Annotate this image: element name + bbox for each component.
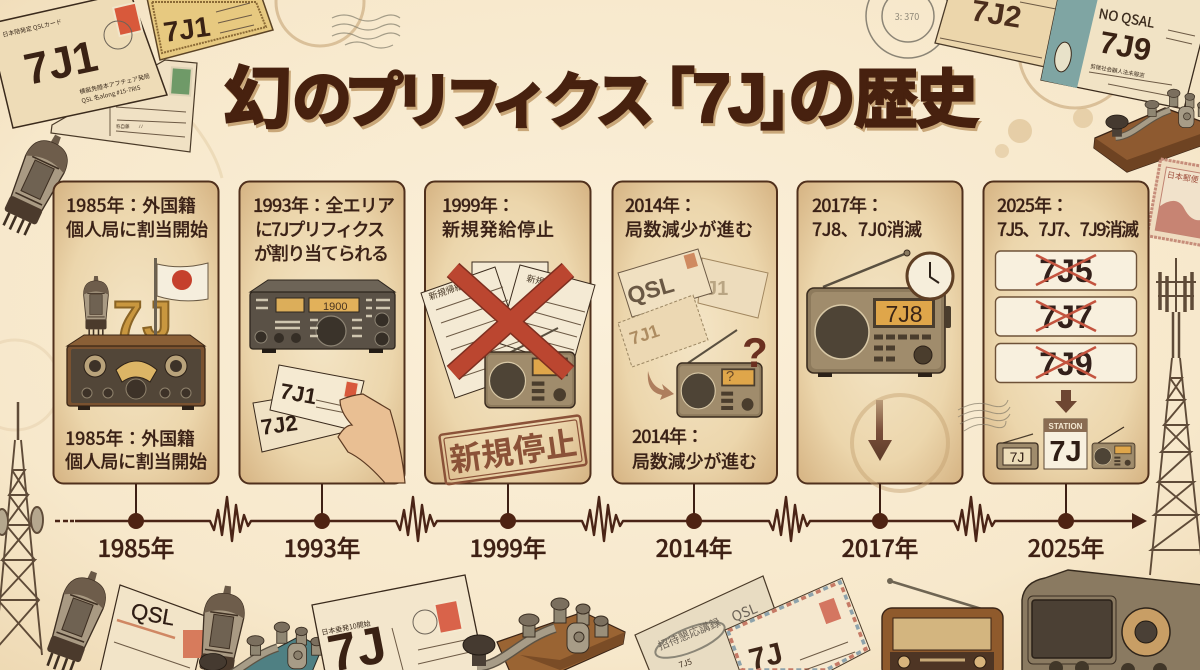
panel: 1993: に7Jプリフィクス [255,216,385,242]
timeline [55,484,1147,564]
panel: 1985: 個人局に割当開始 [66,216,208,242]
panel: 2014 [612,182,777,484]
heading: 1999: 1999年： [442,192,515,218]
panel: 1999 [421,182,595,484]
title: ィ [490,53,550,140]
year labels: 1993年 [284,529,360,564]
postmark top right [866,0,950,58]
faded QSL cards: 7J1 [627,320,662,349]
title: J [728,59,767,137]
QSL cards in hand: 7J2 [259,410,299,440]
icon: radio with question [677,329,768,417]
QSL cards in hand: 7J1 [278,378,319,409]
QSL card: large 7J1: 横艇免陸本アフチェア発局 [78,71,151,96]
year labels: 1985年 [98,529,174,564]
radio tower right [1150,258,1200,575]
heading: 2014: 2014年： [625,192,697,218]
panel: 1999: 新規発給停止 [442,216,554,242]
postage stamp right: 日本郵便 [1166,169,1200,186]
struck 7J7 [996,297,1136,336]
year labels: 2025年 [1028,529,1104,564]
panel: 1993: が割り当てられる [254,240,389,266]
coffee ring [852,395,948,491]
year labels [98,529,1104,564]
icon: transceiver [250,280,395,353]
coffee stains [0,0,1131,430]
faded QSL cards [618,249,768,367]
arrow: timeline head [1132,513,1147,529]
station card [1044,419,1087,469]
panel: 1985: 個人局に割当開始 [65,448,207,474]
arrow: curved [648,371,674,400]
postage stamp right [1147,159,1200,246]
QSL card 7J5 [635,576,775,670]
title: 7 [692,59,731,137]
QSL card: yellow 7J1 [147,0,273,60]
stamp: 新規停止: 新規停止 [446,418,580,482]
QSL card: large 7J1: 日本陪発定 QSLカード [1,17,63,39]
panel: 1993 [240,182,405,484]
papers [421,262,595,398]
icon: mini radio 7J [997,434,1038,469]
title: 幻 [224,43,292,142]
faded QSL cards: QSL [624,271,677,309]
postmark top right: 3: 370 [895,10,919,23]
year labels: 2014年 [656,529,732,564]
QSL card: large 7J1: 7J1 [20,32,102,95]
panel: 1985 [54,182,218,484]
icon: 7J gold letters: 7J [113,291,172,350]
panel: 2025 [984,182,1148,484]
title: 歴 [854,49,918,141]
title: フ [445,57,502,139]
white postcard [51,60,197,152]
arrow: down [1055,390,1077,413]
struck 7J9: 7J9 [1039,346,1093,382]
title: ク [543,53,603,140]
panel: 2014: 局数減少が進む [625,216,753,242]
title: 史 [915,49,979,141]
title: 「 [635,49,695,136]
heading: 1993: 1993年：全エリア [253,192,395,218]
QSL card: large 7J1 [0,0,167,128]
postal wave lines top [332,15,400,48]
title: 」 [760,55,820,142]
title: の [292,51,352,138]
icon: radio with question: ? [742,329,768,376]
timeline nodes [128,513,1074,529]
title: プ [344,53,404,140]
QSL card 7J: 日本垂発10開始 [321,619,371,638]
caption: 2014: 2014年： [632,423,704,449]
icon: mini radio 7J: 7J [1010,449,1024,465]
faded QSL cards: J1 [706,278,728,300]
arrow: down [868,400,892,461]
QSL cards in hand [253,365,405,483]
panel: 2014: 局数減少が進む [632,448,757,474]
icon: Japanese flag [154,258,208,336]
vacuum tube bottom left [38,565,114,670]
QSL card: NO QSAL 7J9: 7J9 [1097,24,1154,68]
QSL card bottom [100,585,208,670]
QSL card 7J5: 招待懇応講録 [656,614,723,654]
struck 7J5: 7J5 [1039,253,1093,289]
title: ス [595,53,655,140]
icon: radio [485,328,575,408]
QSL card: large 7J1: QSL 名along #15-7RIS [80,83,142,105]
morse key teal [199,622,323,670]
stems [136,484,1066,521]
panel: 2025: 7J5、7J7、7J9消滅 [997,216,1139,242]
QSL card bottom: QSL [129,598,177,631]
QSL card 7J5: QSL [728,598,761,627]
morse key top right [1094,89,1200,172]
title: リ [394,53,454,140]
station card: 7J [1049,436,1082,468]
icon: radio with question: ? [726,368,734,385]
radio tower left [0,402,43,655]
icon: hand [338,394,405,483]
papers: 新規帰給 [427,279,465,303]
year labels: 1999年 [470,529,546,564]
struck 7J5 [996,251,1136,290]
QSL card: 7J2 [935,0,1062,67]
year labels: 2017年 [842,529,918,564]
panel: 2017 [798,182,962,491]
icon: radio 7J8: 7J8 [885,301,923,327]
airmail envelope 7J [725,578,870,670]
wooden radio [882,578,1003,670]
station card: STATION [1049,422,1083,431]
icon: transceiver: 1900 [323,301,347,313]
struck 7J9 [996,344,1136,382]
panel: 2017: 7J8、7J0消滅 [812,216,922,242]
postal wave lines middle [958,400,1010,431]
icon: mini radio [1092,427,1135,469]
icon: red X [453,270,568,373]
heading: 1985: 1985年：外国籍 [66,192,196,218]
vacuum tube left [0,127,77,240]
QSL card: NO QSAL 7J9 [1041,0,1200,109]
vacuum tube bottom middle [194,583,248,670]
icon: vacuum tube [84,276,108,338]
white postcard: 称自藤 ﾉﾉ [116,123,143,130]
icon: clock [907,253,953,299]
QSL card: NO QSAL 7J9: NO QSAL [1097,2,1156,32]
QSL card: NO QSAL 7J9: 剪徴社会顧人法未服窓 [1090,62,1146,80]
caption: 1985: 1985年：外国籍 [65,425,195,451]
papers: 新規 [525,271,546,288]
QSL card: yellow 7J1: 7J1 [162,11,212,48]
struck 7J7: 7J7 [1039,299,1093,335]
heading: 2017: 2017年： [812,192,884,218]
icon: vintage receiver [67,335,205,410]
large shortwave radio [1022,570,1200,670]
heading: 2025: 2025年： [997,192,1069,218]
title: の [788,43,856,142]
morse key wood [463,598,625,670]
QSL card 7J [312,575,485,670]
icon: radio 7J8 [807,250,951,377]
